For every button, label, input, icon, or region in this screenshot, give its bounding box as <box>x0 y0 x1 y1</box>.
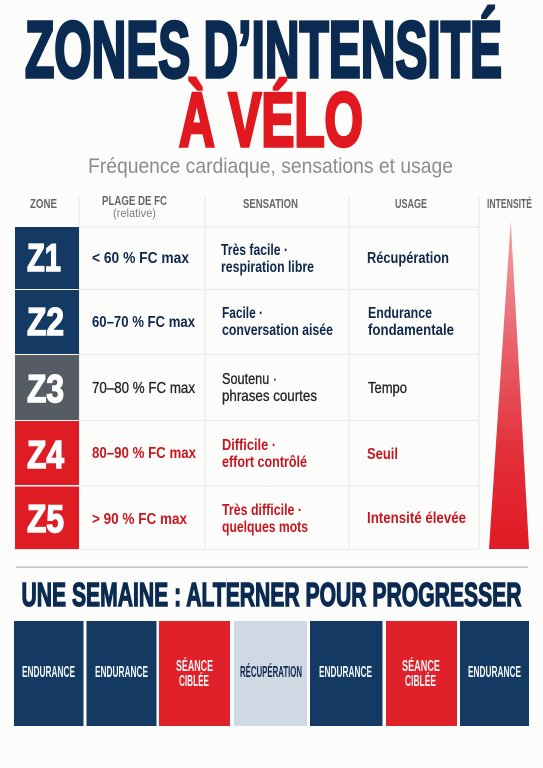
row: Z4: Z4 <box>27 434 64 477</box>
row: Z4: Seuil <box>367 446 398 463</box>
row: Z4: 80–90 % FC max <box>92 445 196 462</box>
row: Z2: Z2 <box>27 301 64 344</box>
column headers: (relative) <box>113 206 156 220</box>
day 3: séance ciblée: SÉANCE <box>176 658 213 675</box>
day 2: endurance <box>86 621 156 726</box>
subtitle: Fréquence cardiaque, sensations et usage <box>88 155 453 178</box>
row: Z2: fondamentale <box>368 322 454 339</box>
row: Z5: Très difficile · <box>222 502 302 519</box>
row: Z1: respiration libre <box>221 259 314 276</box>
row: Z4: Difficile · <box>222 437 276 454</box>
table: intensity zones <box>15 194 479 550</box>
row: Z3: Tempo <box>368 380 407 397</box>
row: Z2: Endurance <box>368 305 432 322</box>
column headers: SENSATION <box>243 197 298 211</box>
intensity scale <box>487 196 532 549</box>
row: Z1 <box>15 227 449 289</box>
day 4: récupération <box>234 621 307 726</box>
title <box>25 5 502 163</box>
row: Z5: Z5 <box>27 498 64 541</box>
row: Z5: > 90 % FC max <box>92 511 187 528</box>
column headers: ZONE <box>30 197 57 211</box>
day 3: séance ciblée: CIBLÉE <box>179 673 209 690</box>
row: Z1: < 60 % FC max <box>92 250 189 267</box>
row: Z2: Facile · <box>222 305 263 322</box>
day 1: endurance <box>14 621 84 726</box>
row: Z1: Très facile · <box>221 242 288 259</box>
row: Z1: Z1 <box>27 237 61 280</box>
row: Z2 <box>15 290 454 354</box>
row: Z4: effort contrôlé <box>222 454 307 471</box>
row: Z4 <box>15 421 398 485</box>
intensity triangle <box>489 221 529 549</box>
column headers: PLAGE DE FC <box>102 194 167 208</box>
row: Z3: Z3 <box>27 368 64 411</box>
table grid <box>15 195 479 550</box>
row: Z5: quelques mots <box>222 519 308 536</box>
row: Z3: Soutenu · <box>222 371 277 388</box>
day 5: endurance: ENDURANCE <box>319 664 372 681</box>
day 6: séance ciblée: CIBLÉE <box>405 673 436 690</box>
row: Z2: conversation aisée <box>222 322 333 339</box>
divider <box>16 566 528 568</box>
column headers: USAGE <box>395 197 427 211</box>
row: Z5 <box>15 486 466 549</box>
day 5: endurance <box>310 621 382 726</box>
row: Z3 <box>15 355 407 420</box>
row: Z3: 70–80 % FC max <box>92 380 195 397</box>
day 1: endurance: ENDURANCE <box>22 664 75 681</box>
row: Z2: 60–70 % FC max <box>92 314 195 331</box>
row: Z5: Intensité élevée <box>367 510 466 527</box>
row: Z1: Récupération <box>367 250 449 267</box>
day 2: endurance: ENDURANCE <box>95 664 148 681</box>
day 6: séance ciblée: SÉANCE <box>402 658 440 675</box>
day 7: endurance <box>460 621 529 726</box>
day 6: séance ciblée <box>386 621 457 726</box>
day 3: séance ciblée <box>159 621 230 726</box>
week schedule <box>14 621 529 726</box>
title: À VÉLO <box>179 78 363 163</box>
column headers <box>30 194 427 220</box>
row: Z3: phrases courtes <box>222 388 317 405</box>
day 4: récupération: RÉCUPÉRATION <box>240 664 302 681</box>
